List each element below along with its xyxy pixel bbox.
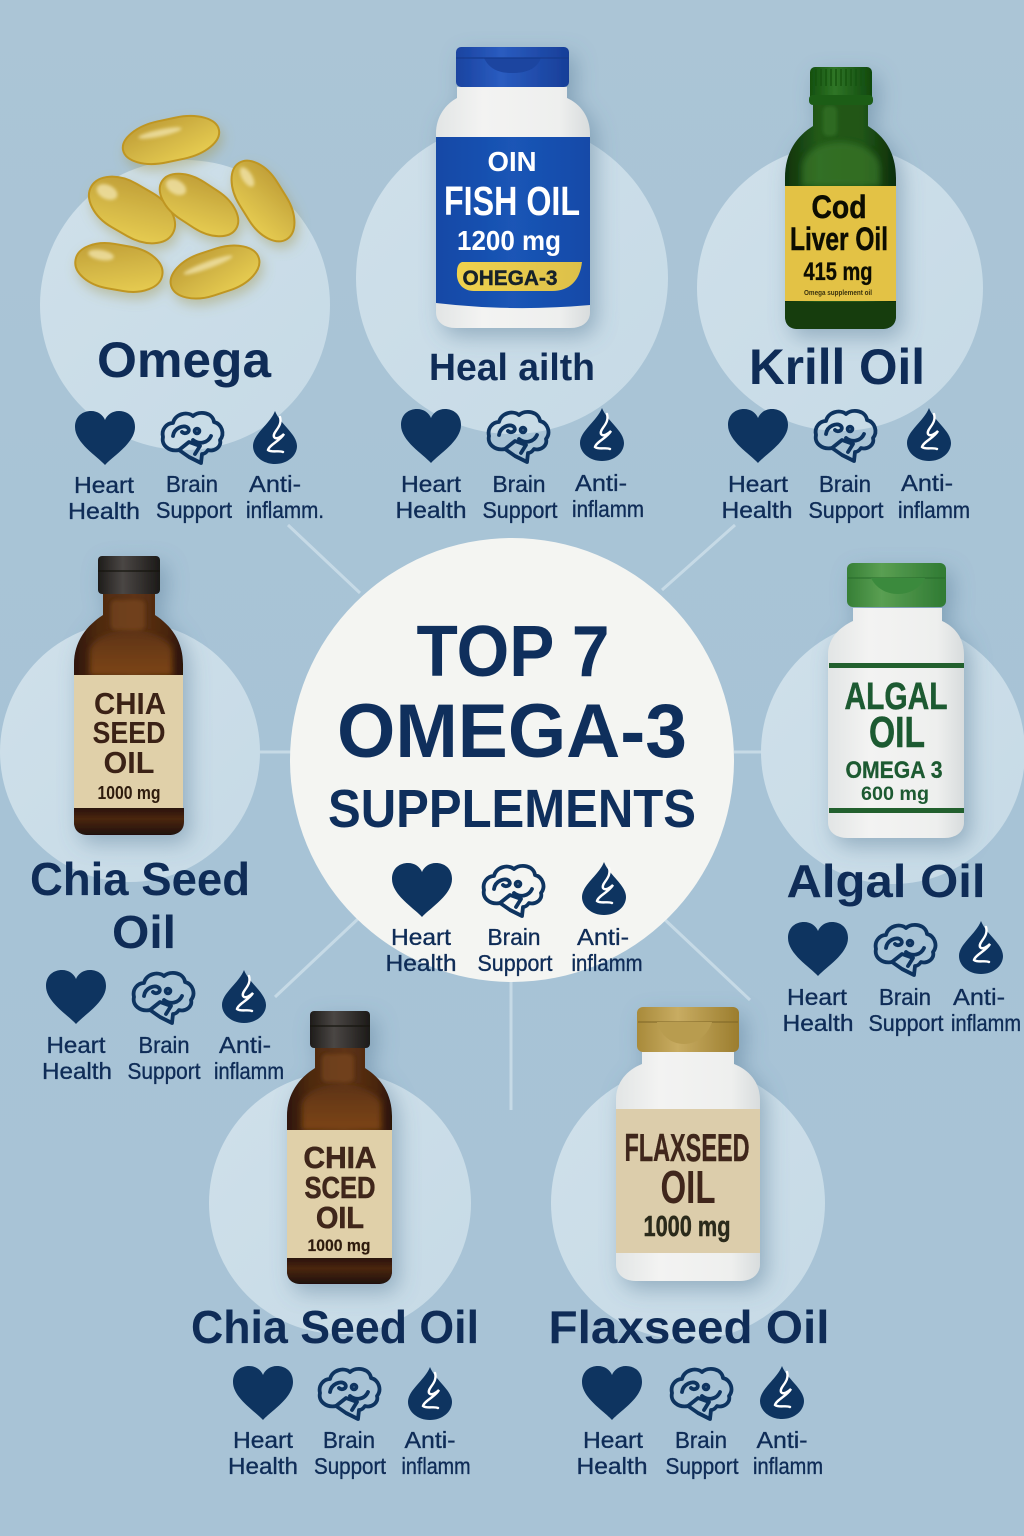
benefit icons: Heart	[46, 1032, 106, 1058]
benefit icons: Anti-	[249, 471, 301, 497]
benefit icons: Heart	[74, 472, 135, 498]
benefit icons: Heart	[233, 1427, 294, 1453]
central disc	[290, 538, 734, 982]
benefit icons: Anti-	[953, 984, 1005, 1010]
disc	[209, 1072, 471, 1334]
panel: Flaxseed oil	[548, 1007, 830, 1479]
benefit icons: Heart	[728, 471, 789, 497]
benefit icons: Brain	[675, 1427, 727, 1453]
benefit icons: Support	[666, 1453, 739, 1479]
benefit icons: Anti-	[756, 1427, 808, 1453]
benefit icons: inflamm	[753, 1453, 823, 1479]
benefit icons: Support	[314, 1453, 387, 1479]
benefit icons: Brain	[323, 1427, 375, 1453]
benefit icons: Health	[68, 498, 140, 524]
panel: Chia seed oil bottom	[191, 1011, 479, 1479]
title: Omega	[97, 332, 272, 388]
benefit icons: Health	[782, 1010, 854, 1036]
title: Heal ailth	[429, 347, 595, 389]
benefit icons: Health	[576, 1453, 648, 1479]
bottle: OIL	[104, 745, 154, 780]
title: Krill Oil	[749, 339, 925, 395]
title: Chia Seed	[30, 853, 250, 905]
benefit icons	[68, 411, 324, 524]
bottle: CHIA	[304, 1140, 376, 1175]
benefit icons: Support	[868, 1010, 944, 1036]
disc	[0, 622, 260, 882]
benefit icons: Support	[128, 1058, 201, 1084]
benefit icons	[42, 970, 284, 1084]
benefit icons	[782, 921, 1021, 1036]
bottle: 1000 mg	[98, 783, 160, 803]
benefit icons: Anti-	[219, 1032, 271, 1058]
panel: Fish oil	[356, 47, 668, 523]
bottle: OIL	[660, 1161, 716, 1213]
benefit icons: Support	[156, 497, 233, 523]
bottle	[287, 1011, 392, 1284]
title: Algal Oil	[786, 855, 986, 907]
benefit icons: Support	[808, 497, 884, 523]
benefit icons	[722, 408, 970, 523]
benefit icons	[396, 408, 644, 523]
benefit icons: Heart	[583, 1427, 644, 1453]
bottle	[828, 563, 964, 838]
disc	[697, 145, 983, 431]
disc	[356, 122, 668, 434]
bottle: SCED	[304, 1170, 376, 1205]
benefit icons: Health	[228, 1453, 298, 1479]
benefit icons: Health	[722, 497, 792, 523]
benefit icons	[386, 862, 642, 976]
benefit icons: Support	[482, 497, 558, 523]
bottle: FISH OIL	[444, 178, 580, 224]
benefit icons: Anti-	[575, 470, 627, 496]
benefit icons	[228, 1366, 470, 1479]
benefit icons: Brain	[166, 471, 218, 497]
benefit icons: inflamm	[572, 496, 644, 522]
bottle	[74, 556, 184, 835]
panel: Chia seed oil left	[0, 556, 284, 1084]
benefit icons: Brain	[492, 471, 546, 497]
bottle: Cod	[812, 189, 866, 225]
heading: TOP 7	[416, 612, 610, 692]
disc	[551, 1066, 825, 1340]
heading	[328, 612, 696, 839]
bottle: FLAXSEED	[624, 1127, 750, 1170]
benefit icons: Anti-	[901, 470, 953, 496]
bottle: Liver Oil	[790, 221, 888, 257]
disc	[761, 620, 1024, 884]
benefit icons: Health	[386, 950, 456, 976]
bottle: CHIA	[94, 686, 166, 721]
disc	[40, 160, 330, 450]
benefit icons: Brain	[488, 924, 540, 950]
panel: Algal oil	[761, 563, 1024, 1036]
panel: Omega capsules	[40, 109, 330, 524]
benefit icons: Support	[478, 950, 553, 976]
panel: central title circle	[290, 538, 734, 982]
bottle: 415 mg	[804, 258, 872, 286]
benefit icons: Anti-	[577, 924, 629, 950]
softgel capsules	[72, 109, 306, 307]
benefit icons: Heart	[391, 924, 452, 950]
bottle: Omega supplement oil	[804, 290, 872, 297]
benefit icons: Heart	[401, 471, 462, 497]
benefit icons: Brain	[819, 471, 871, 497]
bottle: OIL	[316, 1200, 364, 1235]
heading: OMEGA-3	[337, 689, 687, 774]
benefit icons: inflamm.	[246, 497, 324, 523]
benefit icons: inflamm	[898, 497, 970, 523]
bottle: SEED	[92, 715, 166, 750]
benefit icons: Anti-	[404, 1427, 456, 1453]
benefit icons: inflamm	[572, 950, 642, 976]
bottle: ALGAL	[844, 676, 948, 718]
bottle: OIL	[869, 708, 925, 757]
connector lines	[260, 525, 762, 1110]
panel: Krill oil	[697, 67, 983, 523]
bottle: 1000 mg	[644, 1211, 730, 1243]
bottle: OMEGA 3	[846, 757, 942, 784]
benefit icons: Brain	[879, 984, 931, 1010]
benefit icons	[576, 1366, 823, 1479]
bottle: 1200 mg	[457, 225, 561, 256]
heading: SUPPLEMENTS	[328, 779, 696, 839]
title: Flaxseed Oil	[548, 1301, 830, 1353]
benefit icons: inflamm	[214, 1058, 284, 1084]
title second line: Oil	[112, 906, 176, 958]
bottle: 600 mg	[861, 784, 929, 805]
bottle	[785, 67, 896, 329]
bottle: OHEGA-3	[462, 267, 558, 290]
title: Chia Seed Oil	[191, 1301, 479, 1353]
bottle: OIN	[488, 146, 536, 177]
benefit icons: inflamm	[402, 1453, 470, 1479]
benefit icons: Health	[396, 497, 466, 523]
benefit icons: Brain	[138, 1032, 190, 1058]
bottle: 1000 mg	[308, 1236, 370, 1255]
bottle	[436, 47, 590, 328]
bottle	[616, 1007, 760, 1281]
benefit icons: Health	[42, 1058, 112, 1084]
benefit icons: Heart	[787, 984, 848, 1010]
